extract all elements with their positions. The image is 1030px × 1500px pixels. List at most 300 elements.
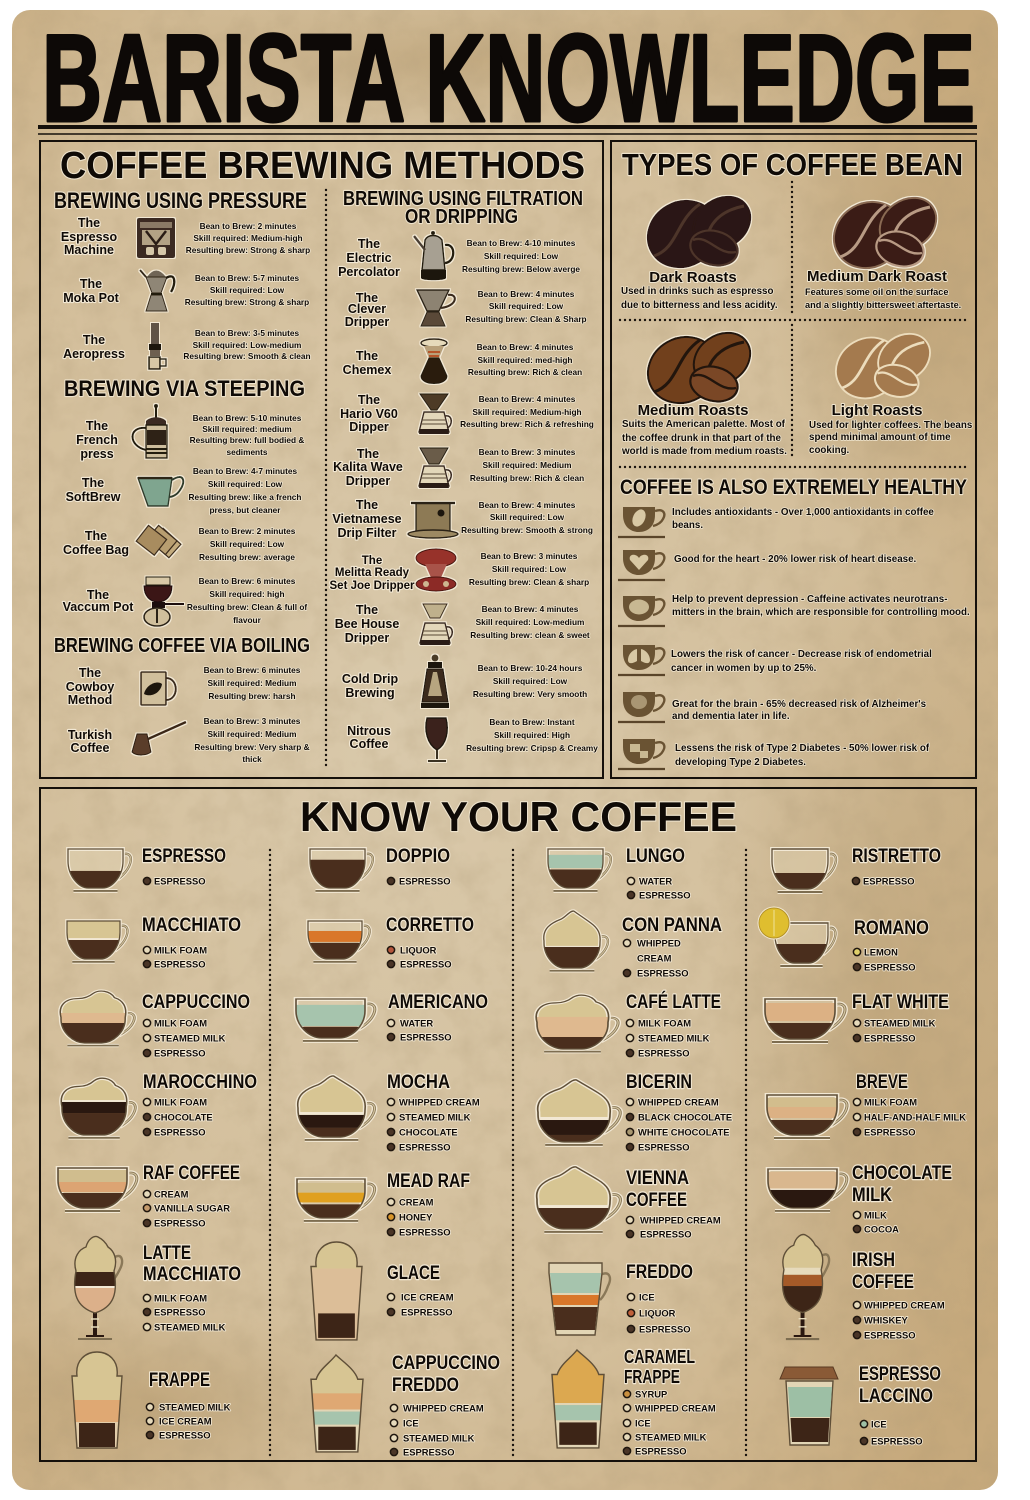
drink: lungo: WATER: [639, 876, 672, 886]
method: moka pot: The: [80, 277, 102, 291]
drink: doppio: DOPPIO: [386, 846, 450, 867]
method: kalita wave: Resulting brew: Rich & clean: [470, 473, 584, 483]
drink: cappuccino: ESPRESSO: [154, 1048, 206, 1058]
benefit: diabetes: [618, 739, 930, 769]
method: electric percolator: The: [358, 237, 380, 251]
method: kalita wave: Bean to Brew: 3 minutes: [479, 447, 576, 457]
method: french press: sediments: [226, 447, 268, 457]
drink: corretto: CORRETTO: [386, 915, 474, 936]
name: espresso laccino: LACCINO: [859, 1386, 933, 1407]
drink: raf coffee: ESPRESSO: [154, 1218, 206, 1228]
drink: caramel frappe: ICE: [635, 1418, 651, 1428]
bean: medium dark roast: [805, 187, 961, 310]
drink: mocha: WHIPPED CREAM: [399, 1096, 480, 1108]
drink: freddo: LIQUOR: [639, 1308, 676, 1318]
benefit: brain: [618, 692, 927, 722]
cup: frappe glass: [72, 1352, 122, 1448]
method: coffee bag: Skill required: Low: [210, 539, 285, 549]
subheading: brewing coffee via boiling: BREWING COFFEE VIA BOILING: [54, 635, 310, 657]
method: aeropress: The: [83, 333, 105, 347]
method: chemex: Bean to Brew: 4 minutes: [477, 342, 574, 352]
method: bee house: Bean to Brew: 4 minutes: [482, 604, 579, 614]
drink: breve: ESPRESSO: [864, 1126, 916, 1138]
drink: mocha: [298, 1072, 480, 1152]
cup: cappuccino freddo glass: [311, 1355, 363, 1452]
drink: freddo: ESPRESSO: [639, 1324, 691, 1334]
method: electric percolator: [338, 231, 580, 280]
method: espresso machine: Resulting brew: Strong & sharp: [186, 245, 310, 255]
method: coffee bag: Resulting brew: average: [199, 552, 295, 562]
drink: mead raf: HONEY: [399, 1212, 433, 1222]
method: moka pot: [63, 270, 309, 311]
drink: flat white: FLAT WHITE: [852, 992, 949, 1013]
drink: marocchino: MILK FOAM: [154, 1096, 207, 1108]
icon: medium bean: [636, 322, 760, 416]
icon: vacuum pot: [144, 577, 184, 626]
drink: romano: ESPRESSO: [864, 962, 916, 972]
cup: freddo glass: [549, 1263, 610, 1335]
heading: coffee is also extremely healthy: COFFEE IS ALSO EXTREMELY HEALTHY: [620, 476, 967, 499]
method: turkish coffee: [68, 716, 310, 764]
drink: con panna: CREAM: [637, 952, 672, 964]
method: cold drip: Skill required: Low: [493, 676, 568, 686]
drink: mocha: ESPRESSO: [399, 1142, 451, 1152]
benefit: depression: mitters in the brain, which are responsible for controlling mood.: [672, 607, 970, 618]
drink: romano: [758, 906, 929, 972]
method: moka pot: Moka Pot: [63, 291, 120, 305]
method: vietnamese drip filter: Resulting brew: Smooth & strong: [461, 525, 593, 535]
name: latte macchiato: MACCHIATO: [143, 1264, 241, 1285]
method: melitta ready set joe: The: [362, 555, 382, 567]
method: vacuum pot: Vaccum Pot: [63, 600, 134, 614]
cup: cappuccino: [60, 991, 134, 1046]
method: vacuum pot: Resulting brew: Clean & full of: [187, 602, 307, 612]
cup: latte macchiato glass: [70, 1235, 122, 1339]
drink: mead raf: ESPRESSO: [399, 1226, 451, 1238]
benefit: antioxidants: Includes antioxidants - Over 1,000 antioxidants in coffee: [672, 507, 934, 518]
method: bee house: Dripper: [345, 631, 389, 645]
method: coffee bag: Bean to Brew: 2 minutes: [199, 526, 296, 536]
drink: espresso: ESPRESSO: [154, 876, 206, 886]
method: kalita wave: Kalita Wave: [333, 460, 403, 474]
benefit: antioxidants: beans.: [672, 520, 703, 531]
drink: latte macchiato: [70, 1235, 241, 1339]
method: softbrew: [66, 466, 301, 515]
method: electric percolator: Electric: [346, 251, 392, 265]
drink: cafe latte: MILK FOAM: [638, 1018, 691, 1028]
method: cold drip: Bean to Brew: 10-24 hours: [478, 663, 583, 673]
bean: dark roasts: Dark Roasts: [649, 269, 737, 286]
drink: freddo: FREDDO: [626, 1262, 693, 1283]
icon: french press: [132, 404, 167, 458]
method: coffee bag: [63, 525, 296, 562]
name: chocolate milk: MILK: [852, 1185, 892, 1206]
method: aeropress: Resulting brew: Smooth & clean: [183, 351, 311, 361]
method: coffee bag: The: [85, 529, 107, 543]
method: hario v60: [340, 393, 594, 434]
cup: ristretto: [772, 849, 836, 892]
method: bee house: Bee House: [335, 617, 399, 631]
icon: vietnamese drip filter: [408, 503, 458, 538]
cup: vienna coffee: [537, 1167, 620, 1232]
method: moka pot: Bean to Brew: 5-7 minutes: [195, 273, 299, 283]
icon: cold drip tower: [421, 654, 449, 708]
benefit: cancer: cancer in women by up to 25%.: [671, 663, 817, 674]
method: clever dripper: Skill required: Low: [489, 301, 564, 311]
method: hario v60: The: [358, 393, 380, 407]
method: espresso machine: [61, 216, 310, 258]
method: hario v60: Hario V60: [340, 407, 398, 421]
drink: bicerin: WHITE CHOCOLATE: [638, 1126, 729, 1138]
name: irish coffee: [852, 1250, 914, 1293]
method: hario v60: Resulting brew: Rich & refreshing: [460, 419, 594, 429]
drink: cafe latte: STEAMED MILK: [638, 1032, 710, 1044]
icon: lemon slice: [758, 906, 790, 940]
icon: percolator: [414, 231, 453, 280]
icon: cup with bean: [618, 507, 665, 537]
drink: espresso laccino: ICE: [871, 1418, 887, 1430]
method: melitta ready set joe: Bean to Brew: 3 minutes: [481, 551, 578, 561]
drink: caramel frappe: [552, 1347, 716, 1456]
drink: cappuccino freddo: [311, 1353, 500, 1458]
name: irish coffee: IRISH: [852, 1250, 895, 1271]
method: softbrew: The: [82, 476, 104, 490]
drink: marocchino: ESPRESSO: [154, 1126, 206, 1138]
drink: raf coffee: CREAM: [154, 1188, 189, 1200]
method: electric percolator: Bean to Brew: 4-10 minutes: [467, 238, 576, 248]
method: melitta ready set joe: Melitta Ready: [335, 567, 410, 579]
cup: mead raf: [297, 1179, 375, 1221]
method: nitrous coffee: Skill required: High: [494, 730, 570, 740]
cup: bicerin: [538, 1080, 620, 1145]
method: cold drip: Resulting brew: Very smooth: [473, 689, 587, 699]
cup: takeaway cup: [780, 1367, 838, 1445]
method: nitrous coffee: Bean to Brew: Instant: [489, 717, 575, 727]
drink: latte macchiato: MILK FOAM: [154, 1292, 207, 1304]
method: clever dripper: Clever: [348, 302, 386, 316]
method: vietnamese drip filter: Vietnamese: [332, 512, 402, 526]
method: chemex: Resulting brew: Rich & clean: [468, 367, 582, 377]
cup: caramel frappe glass: [552, 1350, 604, 1448]
method: softbrew: press, but cleaner: [209, 505, 281, 515]
name: latte macchiato: LATTE: [143, 1243, 191, 1264]
drink: ristretto: RISTRETTO: [852, 846, 941, 867]
method: chemex: [343, 339, 582, 384]
drink: raf coffee: VANILLA SUGAR: [154, 1202, 230, 1214]
method: vacuum pot: Bean to Brew: 6 minutes: [199, 576, 296, 586]
method: french press: press: [80, 447, 114, 461]
method: electric percolator: Skill required: Low: [484, 251, 559, 261]
drink: glace: [311, 1242, 454, 1340]
method: cowboy method: Resulting brew: harsh: [208, 691, 296, 701]
method: aeropress: [63, 323, 311, 369]
name: caramel frappe: CARAMEL: [624, 1347, 695, 1367]
cup: marocchino: [61, 1078, 135, 1138]
method: espresso machine: Espresso: [61, 230, 118, 244]
benefit: brain: Great for the brain - 65% decreased risk of Alzheimer's: [672, 699, 927, 710]
drink: bicerin: WHIPPED CREAM: [638, 1096, 719, 1108]
bean: medium roasts: Suits the American palette. Most of: [622, 419, 786, 430]
name: vienna coffee: COFFEE: [626, 1190, 687, 1211]
method: softbrew: Bean to Brew: 4-7 minutes: [193, 466, 297, 476]
name: cappuccino freddo: CAPPUCCINO: [392, 1353, 500, 1374]
method: softbrew: Skill required: Low: [208, 479, 283, 489]
method: cowboy method: Bean to Brew: 6 minutes: [204, 665, 301, 675]
method: turkish coffee: Skill required: Medium: [208, 729, 296, 739]
drink: cappuccino freddo: ICE: [403, 1418, 419, 1428]
drink: macchiato: MACCHIATO: [142, 915, 241, 936]
bean: light roasts: [809, 324, 973, 456]
drink: breve: MILK FOAM: [864, 1096, 917, 1108]
panel: types of coffee bean and health: [611, 141, 976, 778]
drink: flat white: [765, 992, 949, 1044]
drink: mocha: MOCHA: [387, 1072, 450, 1093]
method: espresso machine: Bean to Brew: 2 minutes: [200, 221, 297, 231]
drink: espresso: [68, 846, 226, 891]
drink: glace: GLACE: [387, 1263, 440, 1284]
bean: dark roasts: [621, 186, 778, 311]
cup: espresso: [68, 849, 131, 891]
method: cowboy method: [66, 665, 301, 707]
icon: softbrew: [138, 477, 183, 506]
icon: cup with sugar cubes: [618, 739, 665, 769]
drink: cappuccino: STEAMED MILK: [154, 1032, 226, 1044]
drink: cappuccino freddo: STEAMED MILK: [403, 1432, 475, 1444]
method: melitta ready set joe: [330, 549, 589, 592]
drink: frappe: STEAMED MILK: [159, 1402, 231, 1412]
method: electric percolator: Percolator: [338, 265, 400, 279]
drink: con panna: CON PANNA: [622, 915, 722, 936]
bean: dark roasts: due to bitterness and less acidity.: [621, 300, 778, 311]
drink: doppio: ESPRESSO: [399, 876, 451, 886]
cup: chocolate milk: [768, 1169, 847, 1211]
drink: breve: [767, 1072, 966, 1138]
drink: irish coffee: WHIPPED CREAM: [864, 1300, 945, 1310]
icon: kalita wave: [419, 448, 451, 488]
heading: know your coffee: KNOW YOUR COFFEE: [300, 793, 737, 840]
cup: breve: [767, 1095, 847, 1138]
method: vietnamese drip filter: The: [356, 498, 378, 512]
subheading: brewing via steeping: BREWING VIA STEEPING: [64, 376, 305, 401]
cup: con panna: [544, 911, 608, 971]
drink: vienna coffee: WHIPPED CREAM: [640, 1214, 721, 1226]
panel: know your coffee: [40, 788, 976, 1461]
benefit: depression: Help to prevent depression - Caffeine activates neurotrans-: [672, 594, 947, 605]
bean: medium dark roast: and a slightly bittersweet aftertaste.: [805, 300, 961, 310]
name: irish coffee: COFFEE: [852, 1272, 914, 1293]
method: chemex: Chemex: [343, 363, 391, 377]
drink: cappuccino freddo: ESPRESSO: [403, 1446, 455, 1458]
drink: vienna coffee: ESPRESSO: [640, 1228, 692, 1240]
drink: lungo: [548, 846, 691, 900]
drink: romano: LEMON: [864, 946, 898, 958]
icon: cowboy mug: [141, 672, 176, 705]
drink: mocha: STEAMED MILK: [399, 1112, 471, 1122]
drink: lungo: LUNGO: [626, 846, 685, 867]
method: vacuum pot: Skill required: high: [209, 589, 285, 599]
method: french press: Skill required: medium: [202, 424, 292, 434]
drink: con panna: ESPRESSO: [637, 968, 689, 978]
drink: cappuccino: CAPPUCCINO: [142, 992, 250, 1013]
bean: medium dark roast: Medium Dark Roast: [807, 268, 947, 285]
method: vacuum pot: flavour: [233, 615, 262, 625]
method: bee house: Resulting brew: clean & sweet: [470, 630, 590, 640]
method: bee house: The: [356, 603, 378, 617]
subheading: brewing using filtration: [343, 188, 583, 228]
drink: caramel frappe: WHIPPED CREAM: [635, 1402, 716, 1414]
drink: marocchino: CHOCOLATE: [154, 1112, 213, 1122]
method: vietnamese drip filter: Bean to Brew: 4 minutes: [479, 500, 576, 510]
cup: mocha: [298, 1076, 375, 1140]
drink: mead raf: CREAM: [399, 1196, 434, 1208]
drink: cafe latte: ESPRESSO: [638, 1048, 690, 1058]
drink: glace: ICE CREAM: [401, 1292, 454, 1302]
drink: corretto: LIQUOR: [400, 944, 437, 956]
drink: chocolate milk: COCOA: [864, 1224, 899, 1234]
method: clever dripper: Resulting brew: Clean & Sharp: [465, 314, 587, 324]
drink: caramel frappe: SYRUP: [635, 1388, 667, 1400]
method: aeropress: Bean to Brew: 3-5 minutes: [195, 328, 299, 338]
method: chemex: Skill required: med-high: [478, 355, 572, 365]
drink: bicerin: [538, 1072, 732, 1152]
method: french press: [76, 404, 304, 461]
method: clever dripper: [345, 289, 587, 329]
bean: medium roasts: world is made from medium roasts.: [621, 446, 787, 457]
drink: breve: BREVE: [856, 1072, 908, 1093]
method: vietnamese drip filter: Drip Filter: [337, 526, 397, 540]
method: softbrew: Resulting brew: like a french: [189, 492, 301, 502]
subheading: brewing using filtration: OR DRIPPING: [405, 206, 518, 228]
drink: doppio: [310, 846, 451, 891]
cup: corretto: [308, 921, 370, 962]
drink: caramel frappe: ESPRESSO: [635, 1446, 687, 1456]
panel: coffee brewing methods: [40, 141, 603, 778]
method: cowboy method: Cowboy: [66, 680, 114, 694]
subheading: brewing using pressure: BREWING USING PRESSURE: [54, 188, 307, 213]
benefit: brain: and dementia later in life.: [672, 711, 790, 722]
method: espresso machine: Skill required: Medium-high: [193, 233, 303, 243]
benefit: cancer: [618, 645, 932, 675]
method: cold drip: Brewing: [345, 686, 395, 700]
drink: flat white: ESPRESSO: [864, 1032, 916, 1044]
benefit: diabetes: developing Type 2 Diabetes.: [675, 757, 806, 768]
method: vietnamese drip filter: [332, 498, 593, 540]
method: cowboy method: The: [79, 666, 101, 680]
icon: hario v60: [419, 394, 451, 434]
icon: cup with brain: [618, 692, 665, 722]
method: kalita wave: The: [357, 447, 379, 461]
method: turkish coffee: Bean to Brew: 3 minutes: [204, 716, 301, 726]
drink: cappuccino freddo: WHIPPED CREAM: [403, 1402, 484, 1414]
drink: frappe: ICE CREAM: [159, 1416, 212, 1426]
drink: chocolate milk: MILK: [864, 1210, 887, 1220]
drink: frappe: [72, 1352, 231, 1448]
drink: mead raf: MEAD RAF: [387, 1171, 470, 1192]
drink: cappuccino: [60, 991, 250, 1058]
drink: cafe latte: [536, 991, 721, 1058]
drink: freddo: [549, 1262, 693, 1335]
heading: types of coffee bean: TYPES OF COFFEE BEAN: [622, 147, 963, 182]
cup: flat white: [765, 999, 845, 1042]
cup: macchiato: [67, 921, 127, 962]
drink: irish coffee: ESPRESSO: [864, 1330, 916, 1340]
subheading: brewing using filtration: BREWING USING FILTRATION: [343, 188, 583, 210]
drink: corretto: [308, 915, 474, 970]
method: moka pot: Resulting brew: Strong & sharp: [185, 297, 309, 307]
icon: medium dark bean: [822, 187, 946, 281]
method: melitta ready set joe: Resulting brew: Clean & sharp: [469, 577, 589, 587]
name: espresso laccino: ESPRESSO: [859, 1364, 941, 1385]
drink: bicerin: ESPRESSO: [638, 1142, 690, 1152]
drink: americano: AMERICANO: [388, 992, 488, 1013]
drink: con panna: WHIPPED: [637, 938, 681, 948]
method: french press: Bean to Brew: 5-10 minutes: [193, 413, 302, 423]
method: moka pot: Skill required: Low: [210, 285, 285, 295]
drink: irish coffee: WHISKEY: [864, 1314, 908, 1326]
icon: coffee bag: [136, 525, 181, 558]
icon: melitta dripper: [416, 549, 456, 591]
bean: light roasts: Used for lighter coffees. The beans: [809, 420, 973, 431]
benefit: cancer: Lowers the risk of cancer - Decrease risk of endometrial: [671, 649, 932, 660]
method: vietnamese drip filter: Skill required: Low: [490, 512, 565, 522]
name: cappuccino freddo: FREDDO: [392, 1375, 459, 1396]
drink: lungo: ESPRESSO: [639, 890, 691, 900]
method: hario v60: Bean to Brew: 4 minutes: [479, 394, 576, 404]
cup: romano: [775, 923, 835, 966]
drink: cafe latte: CAFÉ LATTE: [626, 991, 721, 1013]
bean: dark roasts: Used in drinks such as espresso: [621, 286, 773, 297]
icon: cezve: [132, 722, 186, 755]
method: espresso machine: The: [78, 216, 100, 230]
heading: coffee brewing methods: COFFEE BREWING METHODS: [60, 145, 585, 187]
method: nitrous coffee: Nitrous: [347, 724, 391, 738]
benefit: diabetes: Lessens the risk of Type 2 Diabetes - 50% lower risk of: [675, 743, 930, 754]
benefit: heart: [618, 550, 917, 580]
method: french press: Resulting brew: full bodied &: [190, 435, 304, 445]
drink: espresso laccino: ESPRESSO: [871, 1436, 923, 1446]
name: caramel frappe: [624, 1347, 695, 1387]
method: clever dripper: Bean to Brew: 4 minutes: [478, 289, 575, 299]
drink: caramel frappe: STEAMED MILK: [635, 1432, 707, 1442]
method: hario v60: Dipper: [349, 420, 389, 434]
drink: frappe: FRAPPE: [149, 1370, 210, 1391]
drink: americano: [296, 992, 488, 1042]
drink: macchiato: [67, 915, 241, 970]
name: vienna coffee: VIENNA: [626, 1168, 689, 1189]
drink: marocchino: MAROCCHINO: [143, 1072, 257, 1093]
bean: light roasts: cooking.: [809, 445, 850, 456]
name: chocolate milk: CHOCOLATE: [852, 1163, 952, 1184]
bean: medium roasts: the coffee drunk in that part of the: [622, 433, 781, 444]
name: latte macchiato: [143, 1243, 241, 1285]
drink: frappe: ESPRESSO: [159, 1430, 211, 1440]
drink: bicerin: BICERIN: [626, 1072, 692, 1093]
icon: nitro glass: [426, 718, 447, 761]
drink: latte macchiato: ESPRESSO: [154, 1306, 206, 1318]
method: softbrew: SoftBrew: [66, 490, 121, 504]
method: clever dripper: The: [356, 291, 378, 305]
method: kalita wave: Skill required: Medium: [483, 460, 571, 470]
drink: ristretto: [772, 846, 941, 892]
drink: marocchino: [61, 1072, 257, 1138]
drink: freddo: ICE: [639, 1292, 655, 1302]
icon: cup with lungs: [618, 645, 665, 675]
icon: bee house dripper: [420, 604, 452, 645]
bean: medium roasts: [621, 322, 787, 457]
method: coffee bag: Coffee Bag: [63, 543, 129, 557]
drink: espresso: ESPRESSO: [142, 846, 226, 867]
method: aeropress: Aeropress: [63, 347, 125, 361]
